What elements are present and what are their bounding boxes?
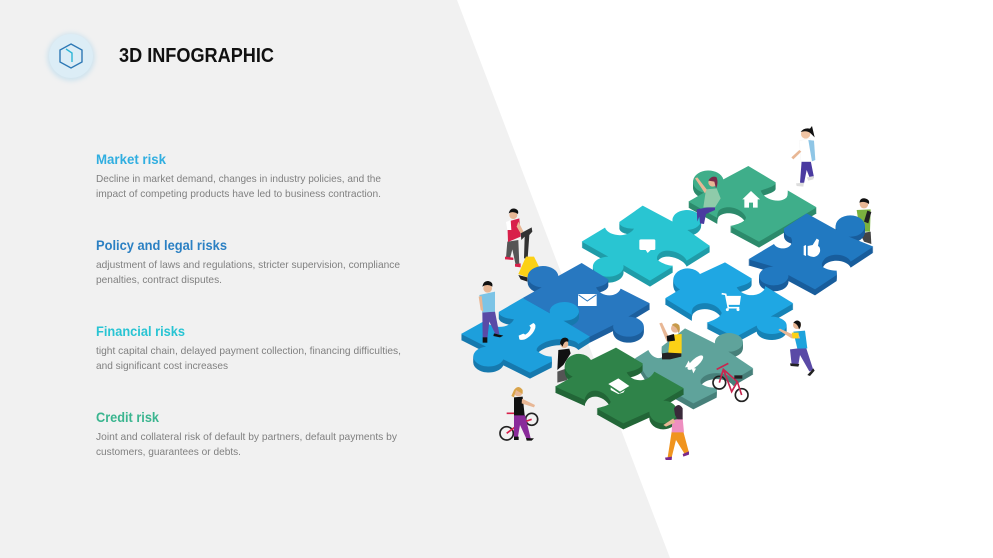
text block: financial risks: tight capital chain, delayed payment collection, financing difficulties, bbox=[96, 345, 401, 357]
icon: graduation cap bbox=[608, 378, 629, 392]
text block: credit risk: Credit risk bbox=[96, 410, 159, 425]
text block: market risk bbox=[96, 152, 381, 200]
person: light blue shirt bbox=[479, 281, 503, 343]
person: green vest behind piece bbox=[857, 198, 871, 244]
text block: financial risks bbox=[96, 324, 401, 372]
text block: credit risk bbox=[96, 410, 398, 458]
text block: policy and legal risks: penalties, contract disputes. bbox=[96, 274, 222, 286]
title: 3D INFOGRAPHIC bbox=[119, 45, 274, 67]
icon: house bbox=[742, 191, 760, 208]
text block: credit risk: customers, guarantees or debts. bbox=[96, 446, 241, 458]
icon: cart bbox=[722, 294, 740, 308]
puzzle piece: thumbs up bbox=[748, 213, 873, 295]
puzzle piece: house bbox=[688, 166, 817, 248]
text block: policy and legal risks bbox=[96, 238, 400, 286]
puzzle piece: graduation cap bbox=[555, 348, 684, 429]
icon: envelope bbox=[578, 294, 597, 306]
puzzle piece: shopping cart bbox=[665, 262, 793, 343]
icon: speech bubble bbox=[639, 239, 655, 253]
icon: telephone bbox=[519, 323, 535, 340]
puzzle piece: rocket bbox=[635, 328, 753, 409]
person: yellow shirt sitting bbox=[659, 323, 682, 359]
text block: market risk: Decline in market demand, changes in industry policies, and the bbox=[96, 173, 381, 185]
icon: rocket bbox=[685, 353, 705, 373]
person: woman with bicycle bbox=[500, 387, 538, 441]
person: pink top and orange trousers bbox=[663, 405, 689, 460]
person: woman in white top walking bbox=[791, 126, 815, 187]
text block: market risk: Market risk bbox=[96, 152, 166, 167]
icon: thumbs up bbox=[804, 239, 820, 257]
header icon: cube bbox=[47, 33, 95, 81]
puzzle piece: mail bbox=[523, 263, 650, 343]
text block: credit risk: Joint and collateral risk of default by partners, default payments by bbox=[96, 431, 398, 443]
text block: financial risks: Financial risks bbox=[96, 324, 185, 339]
text block: policy and legal risks: Policy and legal risks bbox=[96, 238, 227, 253]
person: woman sitting on green piece bbox=[695, 177, 721, 224]
background panel bbox=[0, 0, 670, 558]
text block: financial risks: and significant cost increases bbox=[96, 360, 228, 372]
puzzle piece: chat bbox=[582, 206, 710, 287]
person: red shirt pushing trolley bbox=[505, 209, 539, 282]
text block: market risk: impact of competing products have led to business contraction. bbox=[96, 188, 381, 200]
person: black vest bbox=[557, 338, 571, 383]
red bicycle bbox=[713, 363, 748, 401]
text block: policy and legal risks: adjustment of laws and regulations, stricter supervision, compliance bbox=[96, 259, 400, 271]
puzzle piece: phone bbox=[461, 298, 590, 379]
person: blue shirt pushing bbox=[778, 320, 815, 376]
